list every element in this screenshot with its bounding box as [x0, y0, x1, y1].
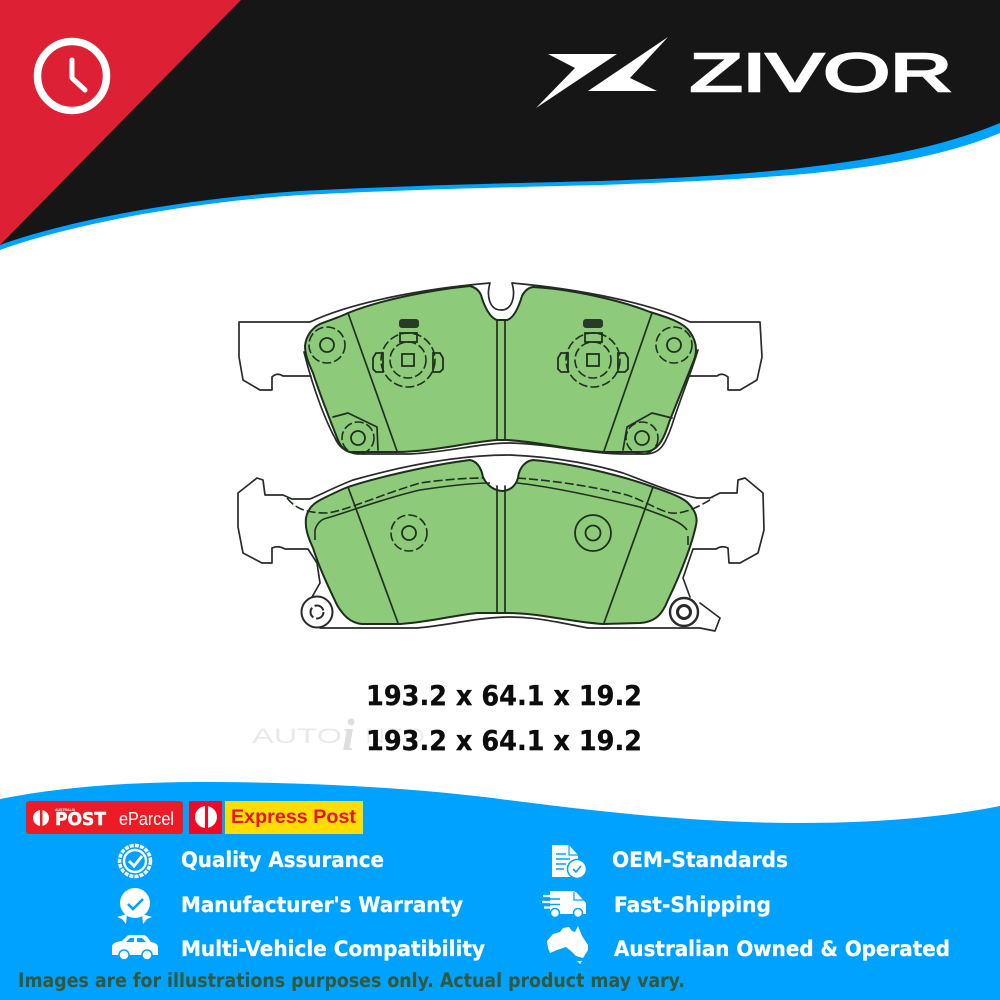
label: compatibility: Multi-Vehicle Compatibility — [181, 937, 485, 962]
watermark: NFO — [365, 725, 425, 748]
disclaimer: Images are for illustrations purposes only. Actual product may vary. — [18, 969, 685, 992]
icon: clock — [38, 42, 106, 110]
lower pad rivets — [391, 515, 611, 551]
upper friction material — [305, 286, 696, 452]
badge: Express Post: Express Post — [231, 807, 357, 828]
logo: ZIVOR — [536, 37, 952, 108]
footer band — [0, 782, 1000, 1000]
badge: eParcel: eParcel — [119, 809, 174, 829]
lower pad chamfer lines — [348, 487, 653, 623]
brake pad: upper — [239, 283, 762, 454]
watermark — [252, 709, 425, 760]
dimensions — [366, 680, 642, 757]
icon: quality badge — [120, 846, 150, 876]
icon: Australia map — [547, 926, 588, 964]
header band — [0, 0, 1000, 250]
dimensions: 193.2 x 64.1 x 19.2 — [366, 680, 642, 712]
upper pad rivets — [309, 327, 692, 454]
label: australian owned: Australian Owned & Operated — [614, 937, 950, 962]
wear sensor left — [373, 319, 443, 387]
badge: eParcel: POST — [55, 810, 106, 830]
dimensions: 193.2 x 64.1 x 19.2 — [366, 725, 642, 757]
right clip ring — [670, 598, 698, 626]
label: warranty: Manufacturer's Warranty — [181, 893, 463, 918]
label: fast shipping: Fast-Shipping — [614, 893, 771, 918]
logo: ZIVOR: ZIVOR — [690, 43, 952, 103]
label: OEM standards: OEM-Standards — [612, 848, 788, 873]
brake pad: lower — [238, 455, 764, 631]
icon: car — [112, 935, 158, 960]
upper pad centre lines — [497, 320, 505, 440]
icon: OEM document — [552, 845, 586, 878]
left clip ring — [302, 596, 332, 628]
upper backing plate — [239, 283, 762, 454]
badge: eParcel — [26, 801, 183, 834]
red corner — [0, 0, 241, 245]
lower pad wear curves — [287, 478, 713, 513]
badge: eParcel: AUSTRALIA — [55, 808, 76, 812]
icon: warranty — [117, 888, 152, 924]
watermark: i — [342, 709, 355, 760]
lower backing plate — [238, 455, 764, 631]
lower friction material — [306, 460, 697, 624]
lower pad centre lines — [497, 486, 505, 613]
label: quality assurance: Quality Assurance — [181, 848, 384, 873]
badge: Express Post — [189, 801, 363, 834]
upper pad chamfer lines — [348, 313, 652, 451]
wear sensor right — [558, 319, 628, 387]
icon: truck — [542, 891, 586, 918]
watermark: AUTO — [252, 725, 342, 748]
